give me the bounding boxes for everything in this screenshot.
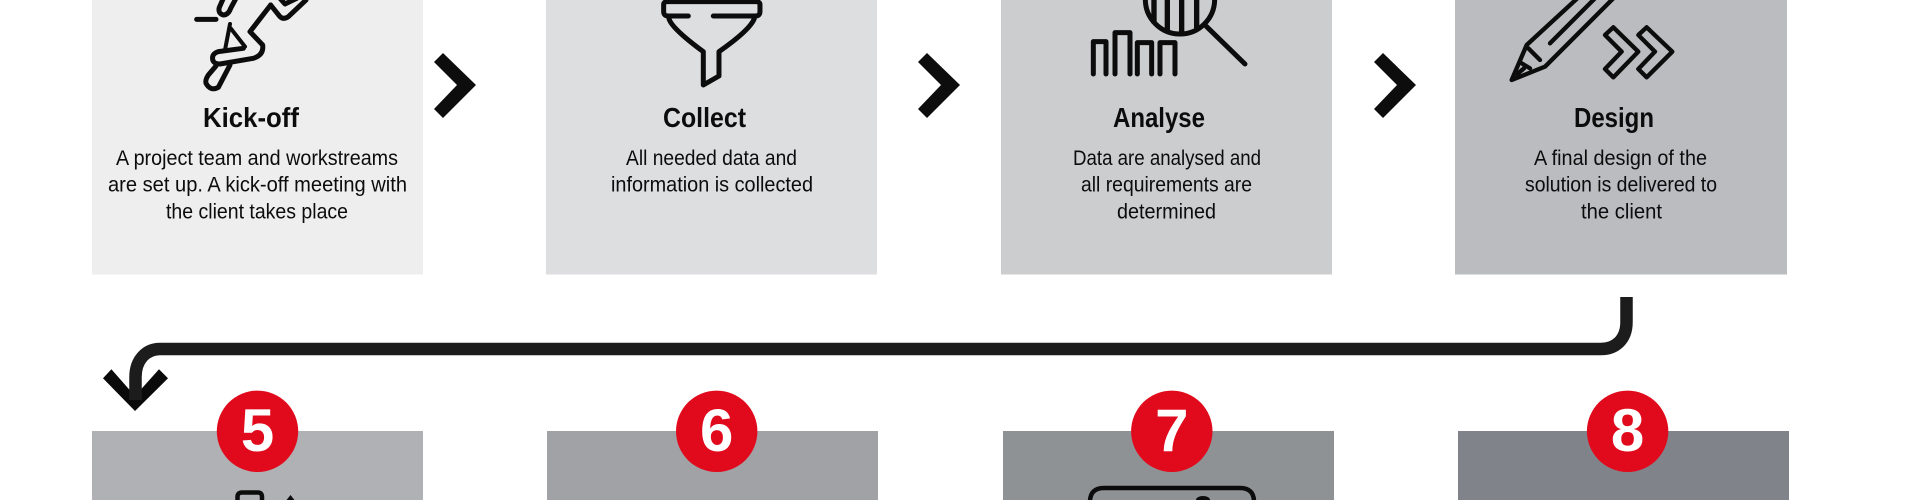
- text: kick-off description: A project team and workstreams: [116, 147, 398, 170]
- heading: collect: Collect: [663, 102, 746, 133]
- text: analyse description: all requirements are: [1081, 174, 1252, 197]
- text: collect description: information is collected: [611, 174, 813, 197]
- text: kick-off description: the client takes place: [166, 200, 348, 223]
- badge: number 6: 6: [700, 397, 733, 464]
- text: kick-off description: are set up. A kick-off meeting with: [108, 174, 407, 197]
- badge: number 7: [1131, 391, 1213, 472]
- panel: step 7: [1003, 391, 1334, 500]
- icon: pencil and double chevrons: [1512, 0, 1672, 80]
- badge: number 5: 5: [241, 397, 274, 464]
- icon: runner: [197, 0, 306, 89]
- arrow: kick-off to collect: [434, 53, 476, 118]
- badge: number 6: [676, 391, 757, 472]
- arrow: connector from design down to step 5: [103, 297, 1626, 411]
- arrow: analyse to design: [1374, 53, 1416, 118]
- heading: kick-off: Kick-off: [203, 102, 300, 133]
- icon: step 7 partial icon: [1090, 488, 1254, 500]
- icon: funnel: [664, 2, 760, 85]
- text: analyse description: Data are analysed and: [1073, 147, 1261, 170]
- panel: step 2 collect: [546, 0, 877, 274]
- text: design description: the client: [1581, 200, 1662, 223]
- icon: step 5 partial icon: [238, 492, 296, 500]
- badge: number 8: 8: [1611, 397, 1644, 464]
- panel: step 3 analyse: [1001, 0, 1332, 275]
- heading: analyse: Analyse: [1113, 102, 1205, 133]
- icon: magnifier over bar chart: [1093, 0, 1245, 74]
- text: design description: A final design of the: [1534, 147, 1707, 170]
- badge: number 5: [217, 391, 298, 472]
- heading: design: Design: [1574, 102, 1654, 133]
- text: collect description: [611, 147, 813, 197]
- text: analyse description: determined: [1117, 200, 1216, 223]
- text: design description: [1525, 147, 1717, 223]
- badge: number 8: [1587, 391, 1668, 472]
- panel: step 4 design: [1455, 0, 1787, 274]
- text: kick-off description: [108, 147, 407, 223]
- panel: step 6: [547, 391, 878, 500]
- panel: step 8: [1458, 391, 1789, 500]
- panel: step 5: [92, 391, 423, 500]
- panel: step 1 kick-off: [92, 0, 423, 274]
- text: collect description: All needed data and: [626, 147, 797, 170]
- text: design description: solution is delivered to: [1525, 174, 1717, 197]
- badge: number 7: 7: [1155, 397, 1188, 464]
- text: analyse description: [1073, 147, 1261, 223]
- arrow: collect to analyse: [918, 53, 960, 118]
